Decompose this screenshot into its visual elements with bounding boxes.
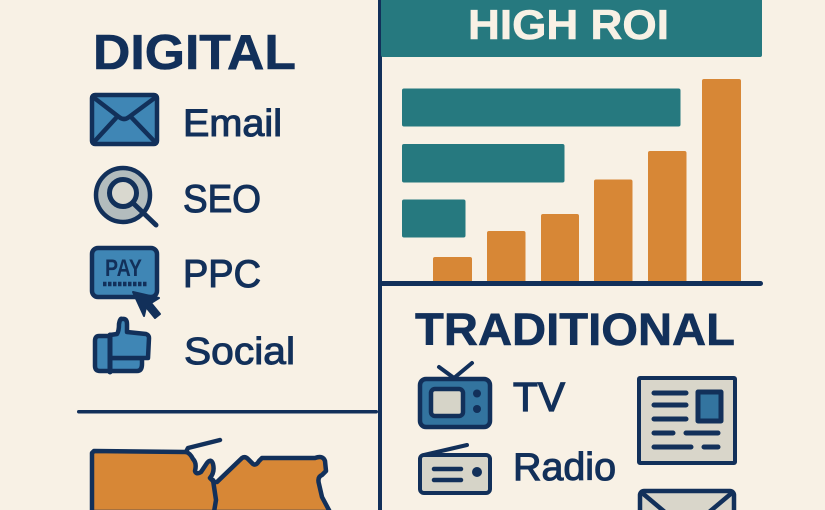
label: radio: Radio <box>513 446 616 489</box>
icon: seo magnifier <box>96 168 156 225</box>
heading: digital: DIGITAL <box>93 26 296 80</box>
icon: ppc pay button with cursor <box>92 248 160 318</box>
icon: newspaper <box>639 378 735 463</box>
icon text: pay: PAY <box>105 255 142 282</box>
label: email: Email <box>183 103 282 145</box>
panel: map <box>92 440 330 510</box>
label: seo: SEO <box>183 178 261 221</box>
icon: email envelope <box>92 95 157 144</box>
heading: traditional: TRADITIONAL <box>415 304 735 355</box>
panel: high roi <box>380 0 763 286</box>
map: orange torn region <box>92 451 330 510</box>
icon: direct mail envelope <box>640 491 734 510</box>
icon: social thumbs up <box>95 319 149 372</box>
icon: tv <box>420 363 490 427</box>
chart: orange rising bars <box>433 79 741 283</box>
banner text: HIGH ROI <box>468 1 669 48</box>
chart: teal horizontal bars <box>402 88 680 238</box>
label: ppc: PPC <box>183 253 261 296</box>
panel: traditional channels <box>415 304 735 510</box>
map: border between regions <box>186 440 220 510</box>
chart axis <box>380 281 763 286</box>
label: social: Social <box>184 331 295 373</box>
banner: high roi <box>381 0 762 57</box>
panel: digital channels <box>92 26 296 373</box>
label: tv: TV <box>513 374 566 420</box>
icon: radio <box>420 445 490 493</box>
